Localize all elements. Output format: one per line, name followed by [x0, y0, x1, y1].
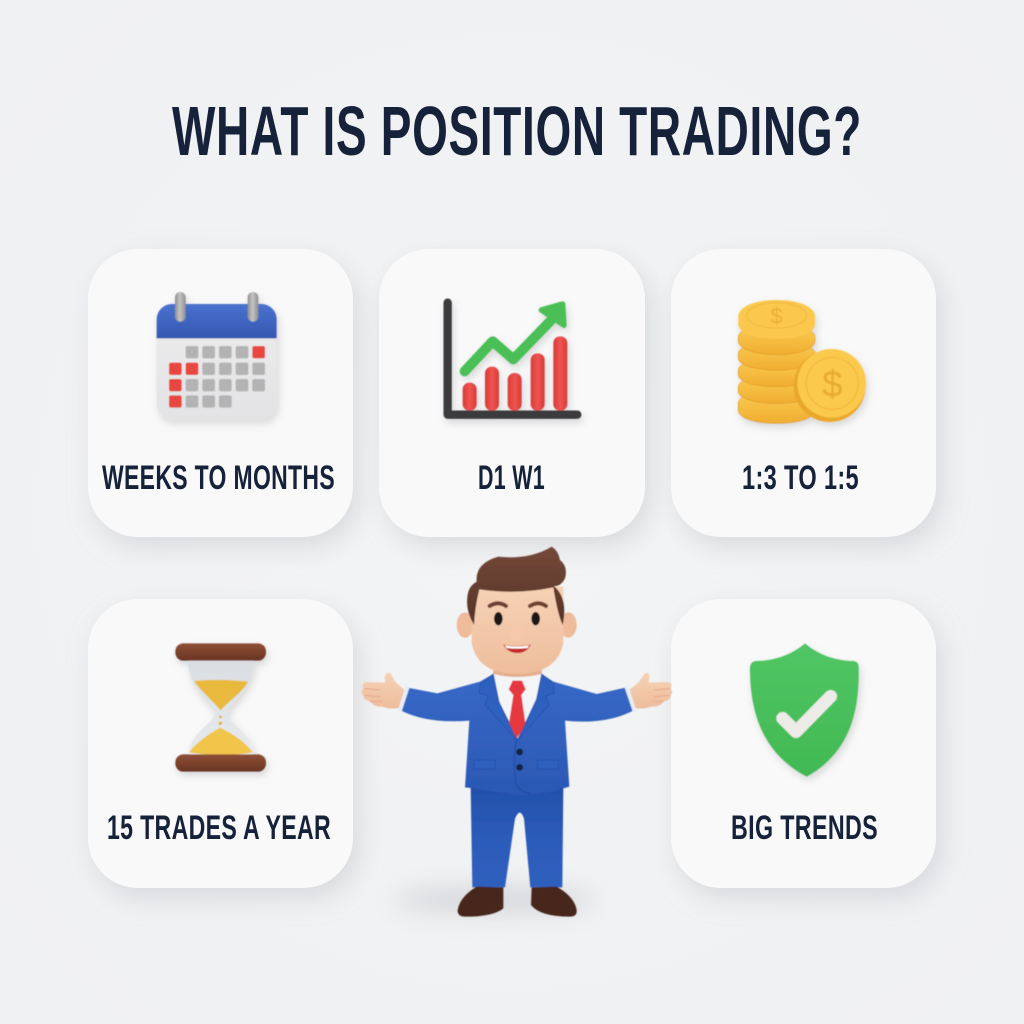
jacket front edge — [514, 740, 530, 793]
hair — [467, 547, 566, 625]
icon: growth chart — [448, 303, 577, 415]
icon: shield with check — [750, 643, 859, 777]
pants — [471, 787, 563, 887]
eyes — [494, 612, 540, 625]
panel: 15 trades a year — [88, 599, 353, 888]
icon: hourglass — [175, 643, 266, 772]
label: WEEKS TO MONTHS — [102, 459, 335, 497]
lapels — [479, 674, 554, 740]
card background — [379, 249, 645, 537]
panel: weeks to months — [88, 249, 353, 537]
shirt — [493, 674, 542, 738]
label: 15 TRADES A YEAR — [107, 809, 331, 847]
panel: 1:3 to 1:5 — [671, 249, 936, 537]
tie — [509, 681, 526, 738]
character: businessman — [361, 547, 672, 917]
jacket — [400, 674, 634, 795]
icon: gold coins — [738, 300, 866, 423]
icon: gold coins: $ — [771, 303, 783, 328]
pockets — [474, 760, 558, 769]
buttons — [516, 749, 523, 771]
card background — [88, 599, 353, 888]
nose — [509, 625, 526, 640]
ears — [457, 612, 577, 638]
card background — [671, 599, 936, 888]
card background — [671, 249, 936, 537]
icon: gold coins: $ — [822, 364, 843, 405]
icon: calendar — [157, 292, 277, 419]
shirt cuffs — [400, 688, 407, 710]
label: D1 W1 — [478, 459, 545, 497]
label: BIG TRENDS — [731, 809, 878, 847]
mouth — [503, 645, 531, 653]
neck — [493, 668, 542, 678]
eyebrows — [490, 603, 546, 606]
panel: big trends — [671, 599, 936, 888]
card background — [88, 249, 353, 537]
label: 1:3 TO 1:5 — [742, 459, 859, 497]
shoes — [458, 887, 577, 917]
ground shadow — [395, 886, 595, 914]
hands — [361, 673, 672, 709]
panel: D1 W1 — [379, 249, 645, 537]
head — [472, 587, 563, 674]
